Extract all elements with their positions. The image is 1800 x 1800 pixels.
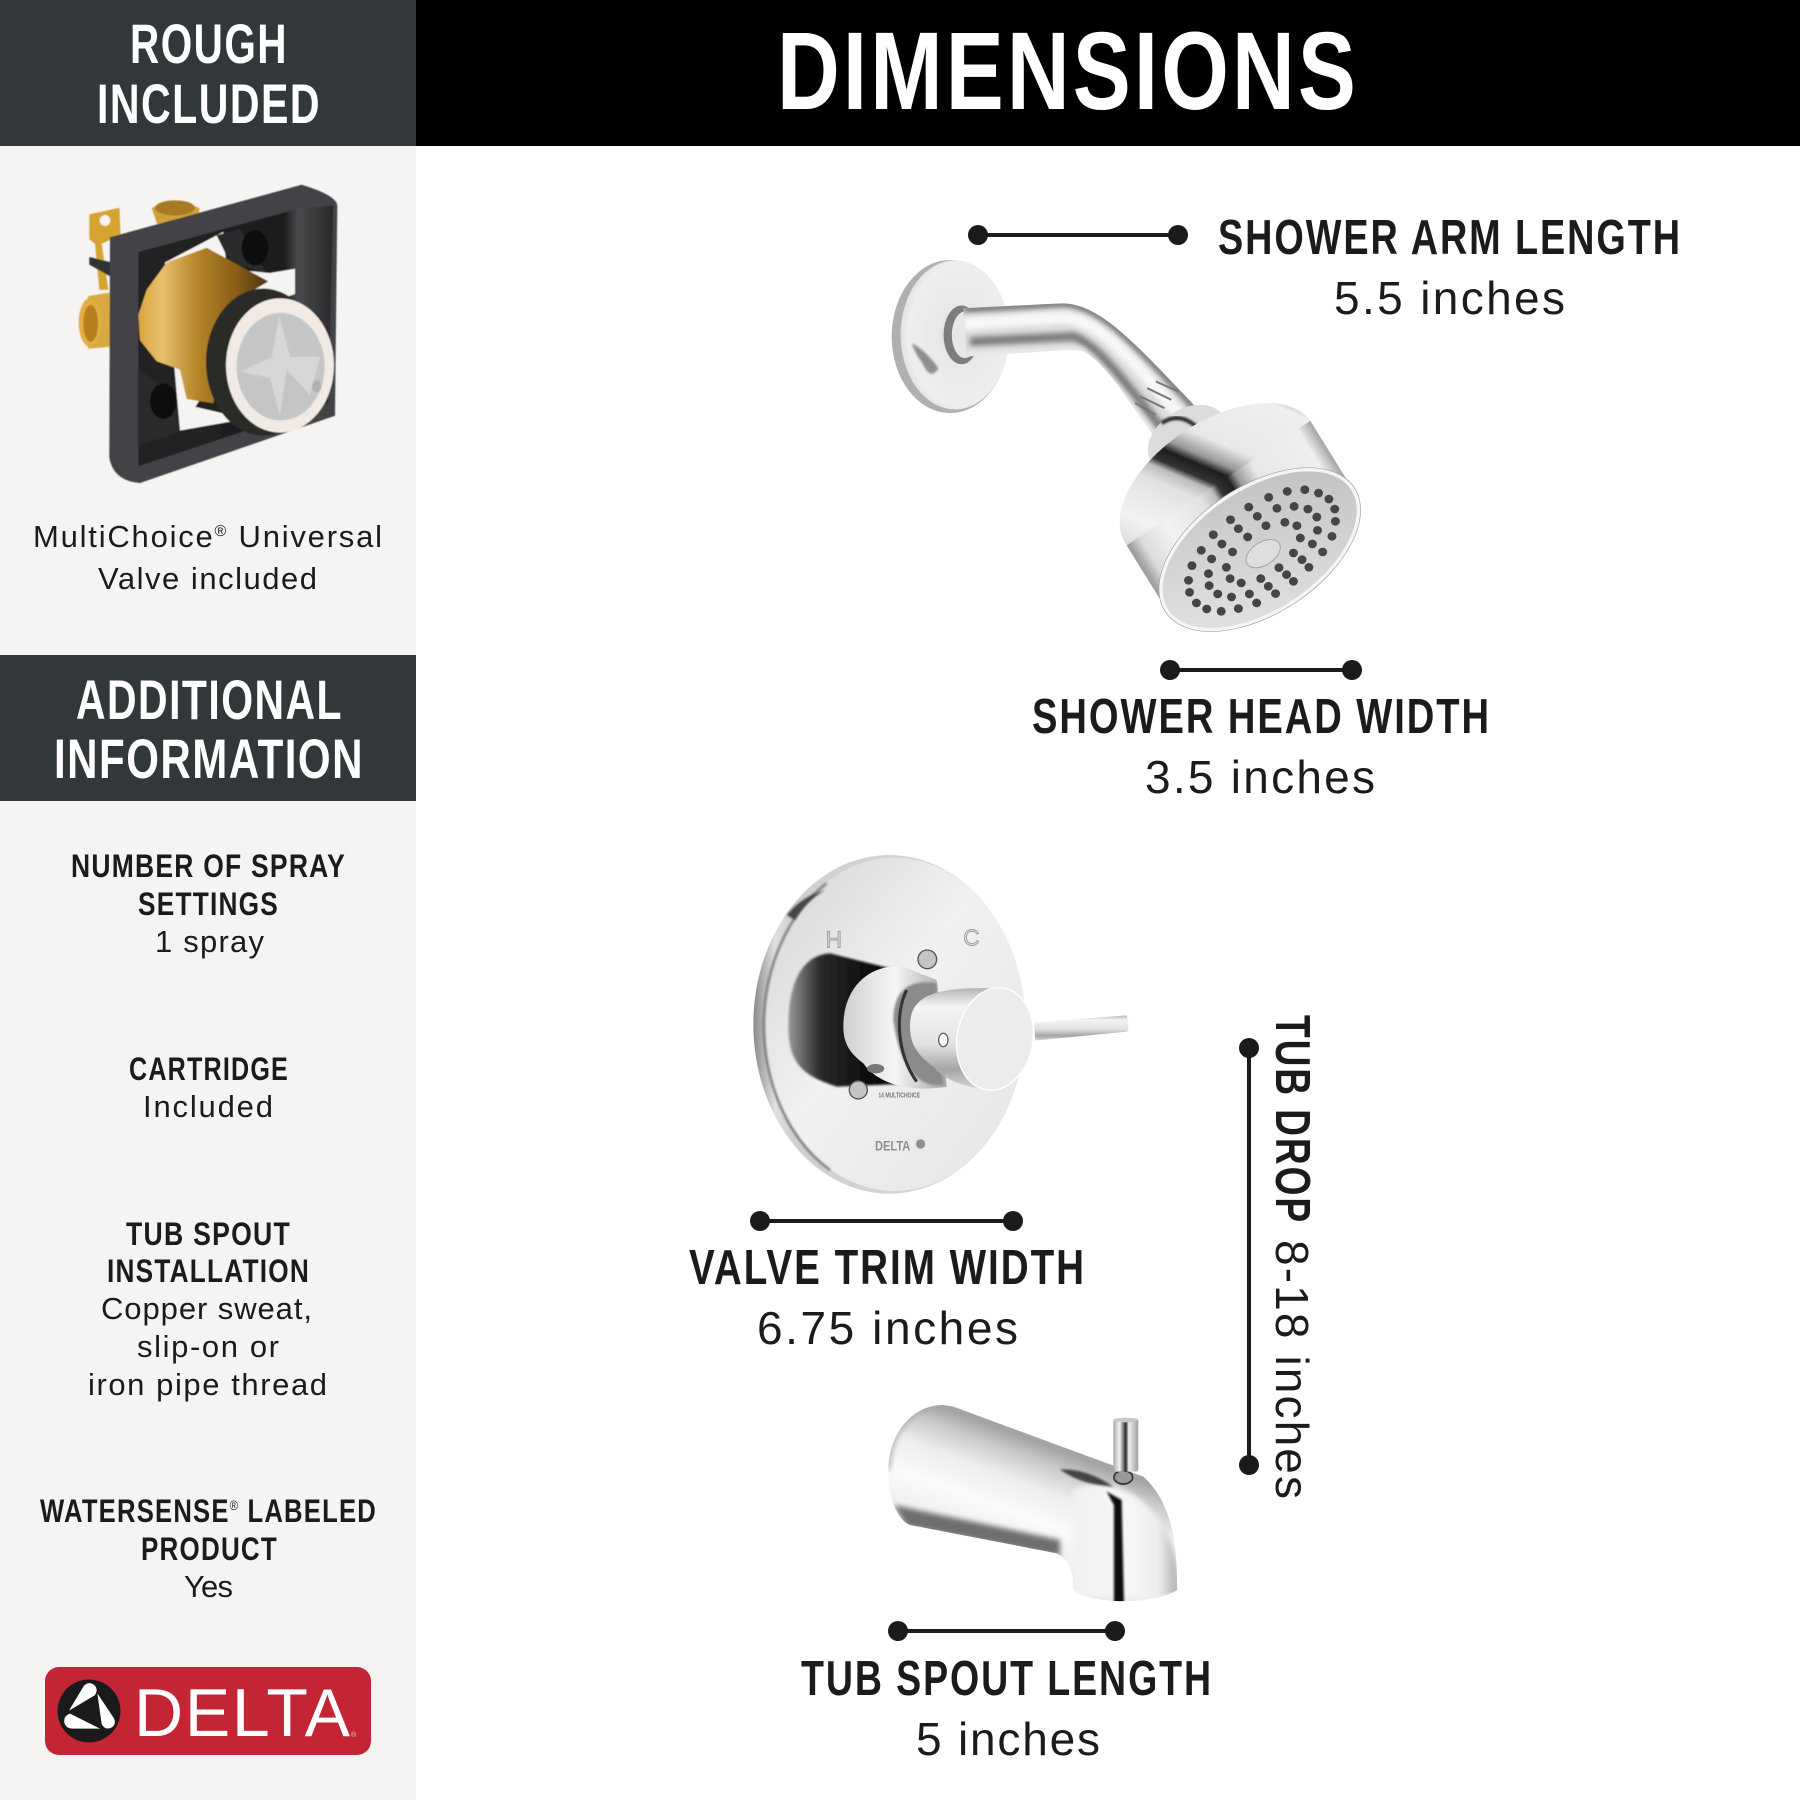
text block: watersense labeled product: Yes bbox=[184, 1569, 233, 1604]
text block: valve caption: ® bbox=[215, 523, 227, 540]
panel: left sidebar background bbox=[0, 146, 416, 1800]
brass body bbox=[138, 248, 268, 403]
logo: Delta: ® bbox=[351, 1731, 357, 1739]
text block: number of spray settings: NUMBER OF SPRAY bbox=[71, 848, 346, 884]
text block: number of spray settings: 1 spray bbox=[155, 924, 264, 959]
text block: number of spray settings bbox=[71, 848, 346, 959]
flange bbox=[892, 260, 1009, 413]
head bbox=[1090, 371, 1391, 665]
frame bbox=[109, 185, 337, 483]
logo: Delta: DELTA bbox=[134, 1675, 351, 1751]
logo: Delta bbox=[45, 1667, 371, 1755]
text block: valve caption: Universal bbox=[228, 519, 382, 554]
icon: valve trim: 14 MULTICHOICE bbox=[878, 1090, 920, 1099]
icon: tub spout bbox=[888, 1405, 1178, 1602]
icon: valve trim: C bbox=[963, 924, 980, 950]
text block: valve caption: MultiChoice bbox=[33, 519, 213, 554]
panel: dimensions title bar bbox=[416, 0, 1800, 146]
label: shower head width: 3.5 inches bbox=[1145, 751, 1375, 803]
icon: valve trim: DELTA bbox=[875, 1138, 910, 1154]
arrow: valve trim width bbox=[750, 1211, 1023, 1231]
arrow: shower arm length bbox=[968, 225, 1188, 245]
label: tub drop bbox=[1265, 1015, 1319, 1499]
title: DIMENSIONS bbox=[777, 10, 1359, 133]
text block: cartridge: Included bbox=[143, 1089, 273, 1124]
label: valve trim width: 6.75 inches bbox=[757, 1302, 1018, 1354]
text block: cartridge: CARTRIDGE bbox=[129, 1051, 289, 1087]
arrow: tub spout length bbox=[888, 1621, 1125, 1641]
text block: tub spout installation: iron pipe thread bbox=[88, 1367, 327, 1402]
label: valve trim width: VALVE TRIM WIDTH bbox=[689, 1241, 1086, 1295]
arrow: tub drop bbox=[1239, 1038, 1259, 1475]
label: tub drop: 8-18 inches bbox=[1266, 1240, 1318, 1499]
label: shower head width: SHOWER HEAD WIDTH bbox=[1032, 690, 1491, 744]
text block: number of spray settings: SETTINGS bbox=[138, 886, 279, 922]
label: tub drop: TUB DROP bbox=[1265, 1015, 1319, 1224]
label: shower head width bbox=[1032, 690, 1491, 803]
spray holes bbox=[1184, 485, 1340, 616]
icon: valve trim: H bbox=[826, 926, 842, 952]
panel: rough included heading bbox=[0, 0, 416, 146]
text block: watersense labeled product: WATERSENSE bbox=[40, 1493, 277, 1529]
text block: watersense labeled product: PRODUCT bbox=[141, 1531, 278, 1567]
label: tub spout length: TUB SPOUT LENGTH bbox=[801, 1652, 1213, 1706]
icon: shower head and arm bbox=[892, 260, 1361, 632]
text block: tub spout installation bbox=[88, 1216, 327, 1402]
text block: cartridge bbox=[129, 1051, 289, 1124]
panel: rough included heading: INCLUDED bbox=[97, 72, 321, 135]
text block: valve caption: Valve included bbox=[98, 561, 317, 596]
label: shower arm length bbox=[1218, 211, 1682, 324]
icon: valve trim bbox=[753, 855, 1128, 1194]
text block: tub spout installation: Copper sweat, bbox=[101, 1291, 312, 1326]
text block: valve caption bbox=[33, 519, 382, 596]
icon: rough-in valve bbox=[79, 185, 337, 483]
label: shower arm length: 5.5 inches bbox=[1334, 272, 1565, 324]
text block: watersense labeled product bbox=[40, 1493, 377, 1604]
panel: rough included heading: ROUGH bbox=[130, 12, 288, 75]
text block: watersense labeled product: ® bbox=[230, 1497, 239, 1513]
panel: additional information heading bbox=[0, 655, 416, 801]
label: tub spout length: 5 inches bbox=[916, 1713, 1100, 1765]
label: tub spout length bbox=[801, 1652, 1213, 1765]
panel: additional information heading: ADDITIONAL bbox=[76, 668, 343, 731]
text block: tub spout installation: slip-on or bbox=[137, 1329, 279, 1364]
panel: additional information heading: INFORMATION bbox=[54, 727, 364, 790]
label: valve trim width bbox=[689, 1241, 1086, 1354]
arm bbox=[963, 303, 1194, 434]
text block: watersense labeled product: LABELED bbox=[239, 1493, 377, 1529]
text block: tub spout installation: INSTALLATION bbox=[107, 1253, 310, 1289]
text block: tub spout installation: TUB SPOUT bbox=[126, 1216, 291, 1252]
arrow: shower head width bbox=[1160, 660, 1362, 680]
